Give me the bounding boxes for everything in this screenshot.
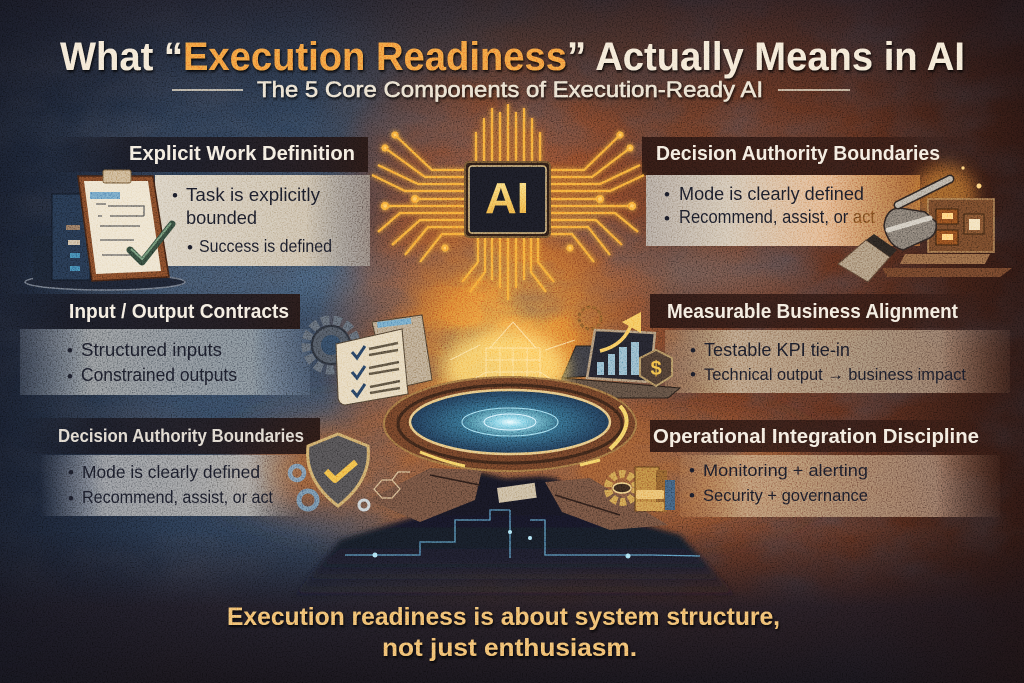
panel: measurable business alignment	[650, 294, 1010, 393]
portal platform	[384, 377, 636, 471]
bullet list: work definition: •	[172, 186, 178, 205]
closing statement	[227, 603, 780, 662]
heading: measurable business alignment: Measurable Business Alignment	[667, 301, 958, 323]
circuit traces	[372, 104, 644, 300]
closing statement: not just enthusiasm.	[382, 634, 637, 662]
heading: decision authority boundaries: Decision Authority Boundaries	[656, 143, 940, 165]
bullet list: authority modes: Recommend, assist, or act	[679, 207, 875, 227]
bullet list: operations: •	[689, 461, 695, 480]
fissure with blue circuits	[290, 468, 740, 600]
icon: AI chip with circuit traces	[372, 104, 644, 300]
icon: robot hand and terminal	[838, 165, 1012, 282]
bullet list: operations: Security + governance	[703, 486, 868, 505]
bullet list: contracts: •	[67, 367, 73, 386]
icon: shield with checkmark and gears	[290, 434, 410, 510]
bullet list: authority modes: •	[68, 489, 74, 508]
bullet list: authority modes: Mode is clearly defined	[82, 462, 260, 482]
icon: laptop with growth chart and dollar badge: $	[650, 358, 662, 380]
panel: decision authority boundaries top	[642, 137, 980, 246]
bullet list: authority modes	[68, 462, 273, 508]
bullet list: authority modes: •	[68, 463, 74, 482]
central energy beam	[443, 322, 575, 404]
bullet list: contracts: •	[67, 341, 73, 360]
bullet list: contracts: Structured inputs	[81, 340, 222, 360]
bullet list: alignment: •	[690, 341, 696, 360]
icon: gear with server stack	[608, 467, 675, 512]
label: AI: AI	[485, 174, 529, 223]
bullet list: contracts	[67, 340, 237, 386]
bullet list: authority modes: •	[664, 209, 670, 228]
heading: decision authority boundaries: Decision Authority Boundaries	[58, 426, 304, 446]
bullet list: work definition: Success is defined	[199, 236, 332, 256]
bullet list: authority modes: •	[664, 185, 670, 204]
panel: explicit work definition	[48, 137, 370, 266]
bullet list: work definition	[172, 184, 332, 257]
bullet list: authority modes: Recommend, assist, or act	[82, 487, 273, 507]
heading: operational integration discipline: Operational Integration Discipline	[653, 426, 979, 448]
bullet list: contracts: Constrained outputs	[81, 365, 237, 385]
bullet list: alignment	[690, 340, 966, 384]
panel: input output contracts	[0, 294, 310, 395]
bullet list: alignment: Testable KPI tie-in	[704, 340, 850, 360]
title: What “Execution Readiness” Actually Means in AI	[60, 35, 965, 79]
bullet list: authority modes	[664, 184, 875, 228]
bullet list: operations: •	[689, 486, 695, 505]
bullet list: work definition: Task is explicitly	[186, 184, 321, 205]
icon: laptop with growth chart and dollar badge	[561, 307, 680, 398]
icon: clipboard with checkmark	[25, 170, 185, 290]
bullet list: work definition: bounded	[186, 207, 257, 228]
subtitle: The 5 Core Components of Execution-Ready AI	[257, 77, 763, 102]
panel: operational integration discipline	[650, 420, 1000, 517]
bullet list: operations	[689, 461, 868, 505]
bullet list: alignment: Technical output → business impact	[704, 365, 966, 384]
heading: explicit work definition: Explicit Work Definition	[129, 143, 355, 165]
bullet list: alignment: •	[690, 365, 696, 384]
panel: decision authority boundaries lower	[20, 418, 320, 516]
closing statement: Execution readiness is about system structure,	[227, 603, 780, 631]
icon: gear and checklist documents	[306, 315, 432, 405]
heading: input output contracts: Input / Output Contracts	[69, 301, 289, 323]
bullet list: operations: Monitoring + alerting	[703, 461, 868, 480]
bullet list: authority modes: Mode is clearly defined	[679, 184, 864, 204]
bullet list: work definition: •	[187, 238, 193, 257]
